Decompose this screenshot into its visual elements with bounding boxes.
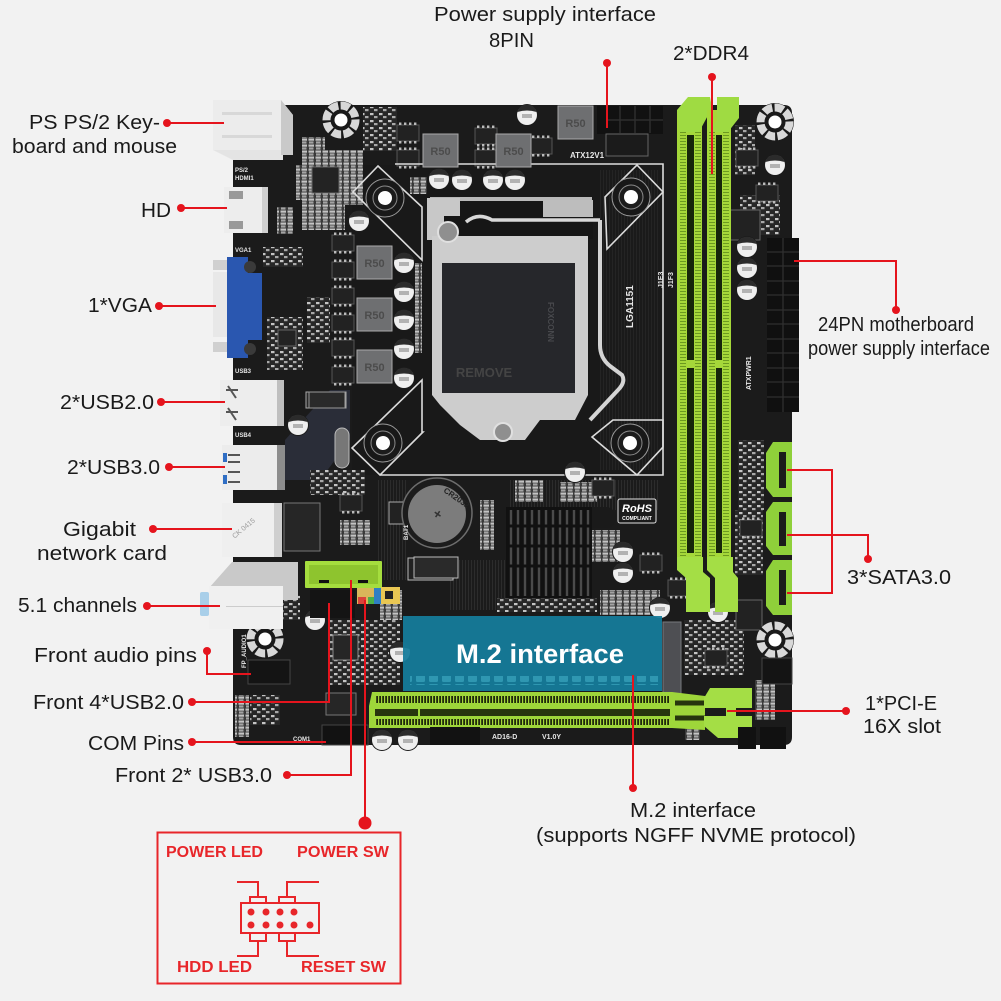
callout: USB 3.0 xyxy=(165,463,225,471)
RoHS badge: COMPLIANT xyxy=(622,516,652,522)
front USB 3.0 header (green) xyxy=(305,561,382,588)
socket outline diamonds xyxy=(352,164,663,475)
silkscreen labels: PS/2 xyxy=(235,168,249,174)
Gigabit LAN port: CK 0415 xyxy=(231,517,257,540)
silkscreen labels: ATXPWR1 xyxy=(746,356,753,390)
label: VGA: 1*VGA xyxy=(88,295,153,317)
label: 24-pin power: 24PN motherboard xyxy=(818,314,974,336)
silkscreen labels: LGA1151 xyxy=(625,285,636,328)
crystal oscillator xyxy=(335,428,349,468)
PCI-E latch xyxy=(704,688,752,738)
label: M.2 interface: (supports NGFF NVME protocol) xyxy=(536,825,856,847)
panel: front panel pinout xyxy=(158,832,400,984)
callout: M.2 xyxy=(629,675,637,792)
PCI-E x16 slot xyxy=(369,688,752,738)
Gigabit LAN port xyxy=(222,503,282,557)
dark area above load plate xyxy=(427,197,593,239)
SATA port 1 xyxy=(766,442,792,497)
callout: DDR4 xyxy=(708,73,716,174)
silkscreen labels: FP_AUDIO1 xyxy=(242,634,248,668)
label: USB 2.0: 2*USB2.0 xyxy=(60,392,154,414)
M.2 overlay text: M.2 interface xyxy=(456,639,624,669)
USB 2.0 port xyxy=(220,380,284,426)
bottom screw xyxy=(494,423,512,441)
24-pin ATX connector xyxy=(767,238,799,412)
label: M.2 interface: M.2 interface xyxy=(630,800,756,822)
silkscreen labels: USB4 xyxy=(235,433,252,439)
front panel colored pins xyxy=(357,587,400,604)
POWER LED label: POWER LED xyxy=(166,844,263,861)
top silver strip xyxy=(430,197,592,201)
REMOVE text: REMOVE xyxy=(456,365,512,380)
label: power supply interface xyxy=(434,4,656,52)
RoHS badge xyxy=(618,499,656,523)
SMD component clusters xyxy=(235,107,780,740)
motherboard xyxy=(200,97,799,751)
callout: gigabit LAN xyxy=(149,525,232,533)
label: USB 3.0: 2*USB3.0 xyxy=(67,457,160,479)
HDD LED label: HDD LED xyxy=(177,959,252,976)
DDR4 slot 1 xyxy=(677,97,712,612)
DDR4 slots xyxy=(677,97,739,612)
load lever xyxy=(590,220,623,420)
CMOS battery CR2032: + xyxy=(430,505,446,523)
right-bottom fan header xyxy=(738,658,792,749)
label: PS/2: PS PS/2 Key- xyxy=(29,112,160,134)
silkscreen labels: VGA1 xyxy=(235,248,252,254)
8-pin ATX12V connector xyxy=(597,106,663,156)
CMOS battery CR2032: CR2032 xyxy=(442,486,471,510)
callout: front USB 2.0 xyxy=(188,603,329,706)
label: PCI-E xyxy=(863,693,941,738)
callout: USB 2.0 xyxy=(157,398,225,406)
board PCB xyxy=(233,105,792,745)
M.2 highlight overlay xyxy=(403,616,662,691)
label: M.2 interface xyxy=(536,800,856,847)
right hinge bracket xyxy=(543,200,593,217)
silkscreen labels: COM1 xyxy=(293,737,311,743)
silkscreen labels: HDMI1 xyxy=(235,176,254,182)
silkscreen labels xyxy=(235,151,753,743)
IC chips xyxy=(278,122,778,715)
audio jack block xyxy=(200,562,298,629)
RoHS badge: RoHS xyxy=(622,503,653,515)
PCB traces xyxy=(285,165,664,610)
metal load plate xyxy=(432,236,588,440)
VGA port xyxy=(213,257,262,358)
silkscreen labels: J1E3 xyxy=(658,272,665,288)
callout: SATA xyxy=(787,470,872,593)
label: front audio pins: Front audio pins xyxy=(34,645,197,667)
F_PANEL header xyxy=(414,557,458,578)
front USB 2.0 header xyxy=(310,590,355,618)
callout: front audio xyxy=(203,647,251,674)
label: 24-pin power xyxy=(808,314,990,360)
silkscreen labels: AD16-D xyxy=(492,734,517,741)
FOXCONN text: FOXCONN xyxy=(546,302,555,342)
label: power supply interface: Power supply interface xyxy=(434,4,656,26)
PS/2 keyboard and mouse port xyxy=(213,100,293,160)
silkscreen labels: J1F3 xyxy=(668,272,675,288)
heatsink xyxy=(506,507,616,598)
DDR4 slot 2 xyxy=(707,97,739,612)
label: 5.1 channels: 5.1 channels xyxy=(18,595,137,617)
label: HD: HD xyxy=(141,200,171,222)
mounting holes xyxy=(364,178,650,462)
label: gigabit network card: Gigabit xyxy=(63,519,137,541)
callout: 5.1 channels xyxy=(143,602,220,610)
HDMI port xyxy=(224,187,268,233)
label: front USB 2.0: Front 4*USB2.0 xyxy=(33,692,184,714)
label: gigabit network card: network card xyxy=(37,543,167,565)
callout: front USB 3.0 xyxy=(283,580,351,779)
CPU socket LGA1151 xyxy=(427,197,623,441)
silkscreen labels: V1.0Y xyxy=(542,734,561,741)
silkscreen labels: ATX12V1 xyxy=(570,151,605,160)
label: PS/2 xyxy=(12,112,177,158)
inductors xyxy=(357,106,593,383)
callout: 24-pin power xyxy=(794,261,900,314)
USB header xyxy=(309,392,345,408)
callout: PCI-E xyxy=(727,707,850,715)
POWER SW label: POWER SW xyxy=(297,844,390,861)
socket cavity xyxy=(442,263,575,393)
callout: HD xyxy=(177,204,227,212)
retention wire xyxy=(466,216,600,222)
bottom pin header xyxy=(430,727,480,745)
COM header xyxy=(322,725,368,745)
callout: VGA xyxy=(155,302,216,310)
SATA port 3 xyxy=(766,560,792,615)
label: SATA: 3*SATA3.0 xyxy=(847,567,951,589)
CMOS battery CR2032 xyxy=(389,478,472,548)
front audio header xyxy=(248,660,290,684)
label: PS/2: board and mouse xyxy=(12,136,177,158)
label: PCI-E: 1*PCI-E xyxy=(865,693,937,715)
M.2 socket xyxy=(663,622,681,694)
silkscreen labels: USB3 xyxy=(235,369,252,375)
callout: PS/2 xyxy=(163,119,224,127)
callout: COM xyxy=(188,738,326,746)
label: gigabit network card xyxy=(37,519,167,565)
label: front USB 3.0: Front 2* USB3.0 xyxy=(115,765,272,787)
label: power supply interface: 8PIN xyxy=(489,30,534,52)
RESET SW label: RESET SW xyxy=(301,959,387,976)
label: PCI-E: 16X slot xyxy=(863,716,941,738)
label: COM pins: COM Pins xyxy=(88,733,184,755)
callout: 8-pin power xyxy=(603,59,611,128)
pin header diagram xyxy=(237,882,319,956)
star screw holes xyxy=(246,101,794,659)
left hinge bracket xyxy=(427,198,460,240)
capacitors xyxy=(287,104,786,751)
USB 3.0 port xyxy=(222,445,285,490)
SATA port 2 xyxy=(766,502,792,555)
SATA connectors xyxy=(766,442,792,615)
callout: front panel xyxy=(358,600,372,830)
hinge screw xyxy=(438,222,458,242)
silkscreen labels: BAT1 xyxy=(404,524,410,540)
label: DDR4: 2*DDR4 xyxy=(673,43,749,65)
